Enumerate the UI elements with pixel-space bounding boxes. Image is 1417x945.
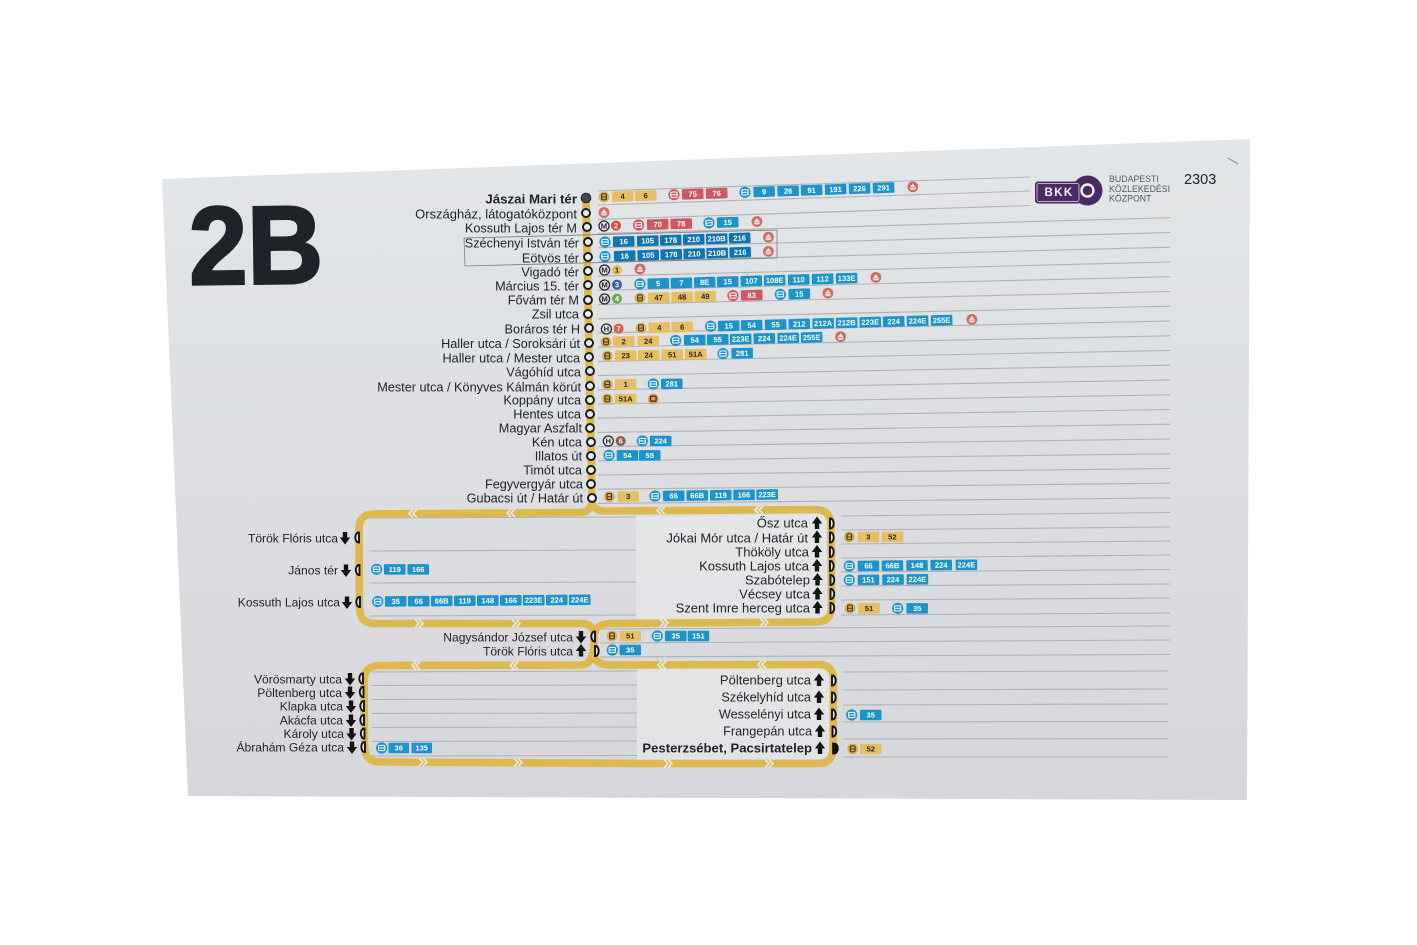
row: Klapka utca: Klapka utca — [280, 700, 343, 714]
row: Boráros tér H: 212 — [793, 319, 806, 329]
row: Wesselényi utca: Wesselényi utca — [719, 708, 812, 722]
row: Kossuth Lajos utca (left): Kossuth Lajos utca — [238, 596, 340, 610]
row: Boráros tér H: 224 — [887, 317, 901, 326]
row: Széchenyi István tér — [465, 231, 774, 250]
row: Kossuth Lajos utca (left): 66 — [414, 597, 423, 606]
row: Boráros tér H: 212A — [814, 319, 833, 328]
row: Nagysándor József utca: 35 — [671, 632, 681, 641]
row: Kossuth Lajos utca (left): 223E — [525, 596, 543, 605]
row: Kén utca: 6 — [619, 437, 623, 446]
row: Jókai Mór utca / Határ út: 3 — [866, 533, 871, 542]
row: Vigadó tér: M — [601, 266, 608, 275]
row: Haller utca / Soroksári út: 24 — [644, 337, 653, 346]
row: Szabótelep — [745, 572, 928, 588]
row: Március 15. tér: 133E — [838, 274, 856, 283]
route line — [359, 198, 834, 764]
row: Március 15. tér — [495, 272, 881, 294]
row: Március 15. tér: 7 — [679, 278, 684, 288]
row: Zsil utca: Zsil utca — [532, 308, 580, 322]
row: Ábrahám Géza utca: 135 — [415, 744, 429, 753]
row: Kossuth Lajos utca (left): 224 — [550, 596, 564, 605]
row: Fővám tér M: 15 — [795, 289, 804, 299]
row: Kén utca: 224 — [654, 437, 668, 446]
row: Haller utca / Mester utca: Haller utca / Mester utca — [442, 352, 581, 366]
row: Kossuth Lajos utca (left): 119 — [459, 596, 471, 605]
row: Ábrahám Géza utca — [236, 740, 432, 754]
row: Jászai Mari tér: 76 — [712, 189, 721, 198]
text: organisation name — [1109, 174, 1170, 204]
row: Országház: Országház, látogatóközpont — [415, 206, 577, 222]
row: Wesselényi utca — [719, 708, 882, 722]
row: Boráros tér H: 15 — [724, 321, 734, 331]
row: Fővám tér M: M — [601, 295, 608, 304]
row: Boráros tér H: H — [604, 325, 609, 334]
row: Jászai Mari tér: 75 — [688, 190, 698, 199]
row: Ábrahám Géza utca: 36 — [394, 744, 403, 753]
row: Jászai Mari tér: 26 — [784, 186, 792, 196]
row: Haller utca / Soroksári út: 54 — [690, 336, 700, 345]
row: Ábrahám Géza utca: Ábrahám Géza utca — [236, 740, 344, 754]
row: Március 15. tér: 107 — [745, 276, 758, 286]
row: Timót utca: Timót utca — [523, 464, 583, 478]
row: Szent Imre herceg utca — [676, 600, 928, 616]
row: Haller utca / Mester utca: 23 — [621, 351, 630, 360]
row: Kossuth Lajos utca (left) — [238, 594, 591, 610]
row: Kossuth Lajos utca (right): 148 — [911, 561, 923, 570]
row: Kossuth Lajos tér M: M — [601, 222, 607, 231]
row: Akácfa utca: Akácfa utca — [280, 714, 343, 728]
row: Ősz utca: Ősz utca — [757, 516, 809, 530]
row: Kossuth Lajos utca (right): 224 — [935, 561, 948, 570]
row: Kossuth Lajos tér M: 2 — [614, 221, 618, 230]
row: Gubacsi út / Határ út: 66 — [669, 491, 678, 501]
row: Kossuth Lajos tér M: 15 — [723, 218, 733, 227]
row: Jászai Mari tér: 191 — [829, 185, 843, 194]
row: Kossuth Lajos utca (left): 148 — [481, 596, 494, 605]
row: Vörösmarty utca: Vörösmarty utca — [254, 672, 342, 686]
row: Jászai Mari tér: 9 — [762, 187, 766, 196]
row: Szabótelep: Szabótelep — [745, 572, 810, 588]
row: Vigadó tér — [521, 264, 645, 280]
row: Vécsey utca: Vécsey utca — [739, 586, 811, 602]
row: Eötvös tér: 16 — [620, 251, 629, 261]
row: Fővám tér M: 4 — [615, 294, 620, 303]
row: Széchenyi István tér: 16 — [619, 237, 628, 246]
row: Illatos út: 55 — [645, 451, 655, 460]
text: organisation name: BUDAPESTI — [1109, 174, 1159, 184]
row: Eötvös tér: 178 — [665, 250, 678, 259]
row: Fővám tér M: 48 — [678, 293, 686, 302]
row: Mester utca / Könyves Kálmán körút — [377, 378, 683, 394]
row: Haller utca / Soroksári út: 2 — [621, 337, 626, 346]
row: Kossuth Lajos utca (right): 224E — [957, 560, 975, 570]
row: Széchenyi István tér: 210 — [687, 235, 700, 244]
row: Kossuth Lajos utca (left): 224E — [571, 595, 589, 605]
row: Gubacsi út / Határ út: 119 — [714, 491, 727, 500]
row: Kossuth Lajos tér M: 78 — [677, 219, 686, 229]
row: Magyar Aszfalt: Magyar Aszfalt — [499, 422, 582, 436]
row: János tér: 119 — [389, 565, 401, 574]
row: Kossuth Lajos utca (right) — [699, 558, 977, 574]
row: Wesselényi utca: 35 — [866, 711, 876, 720]
row: Haller utca / Mester utca: 51 — [668, 350, 677, 359]
row: Széchenyi István tér: 216 — [733, 234, 746, 243]
row: Szabótelep: 151 — [862, 575, 876, 585]
row: János tér: János tér — [288, 564, 338, 578]
row: Március 15. tér: 110 — [792, 275, 805, 284]
row: Eötvös tér — [522, 246, 774, 266]
row: Szent Imre herceg utca: 51 — [865, 604, 874, 613]
row: Haller utca / Mester utca: 281 — [736, 349, 749, 358]
row: Koppány utca: 51A — [619, 395, 633, 404]
row: Ősz utca — [757, 516, 834, 530]
row: Frangepán utca: Frangepán utca — [723, 724, 813, 738]
row: Jászai Mari tér: 4 — [620, 192, 626, 201]
row: Fővám tér M: 83 — [747, 291, 756, 300]
row: Török Flóris utca (right): 35 — [626, 646, 635, 655]
row: Március 15. tér: 112 — [816, 274, 829, 284]
row: Jászai Mari tér: 91 — [807, 186, 817, 195]
row: Koppány utca: Koppány utca — [503, 394, 582, 408]
row: Jászai Mari tér: 6 — [643, 191, 648, 200]
row: Széchenyi István tér: 210B — [707, 234, 726, 244]
row: Kossuth Lajos tér M: Kossuth Lajos tér M — [465, 222, 577, 236]
row: Török Flóris utca (left): Török Flóris utca — [248, 532, 338, 546]
row: Jászai Mari tér: Jászai Mari tér — [485, 192, 577, 206]
row: Pöltenberg utca (right): Pöltenberg utca — [720, 672, 812, 688]
row: Hentes utca: Hentes utca — [513, 408, 582, 422]
row: Pöltenberg utca (left): Pöltenberg utca — [257, 686, 342, 700]
row: Fővám tér M: 47 — [654, 293, 663, 302]
row: Károly utca: Károly utca — [284, 727, 344, 741]
row: Kossuth Lajos utca (left): 35 — [391, 597, 401, 606]
panel: lighter loop interior — [636, 514, 828, 620]
row: Kossuth Lajos utca (left): 66B — [435, 597, 449, 606]
callout: grouped stops box — [464, 230, 777, 266]
row: Nagysándor József utca: 151 — [692, 632, 706, 641]
panel: lighter lower loop interior — [637, 668, 830, 760]
row: Pesterzsébet, Pacsirtatelep: 52 — [866, 745, 875, 754]
row: Széchenyi István tér: Széchenyi István tér — [465, 236, 580, 250]
row: Eötvös tér: 105 — [642, 251, 655, 260]
row: Jászai Mari tér: 291 — [877, 183, 891, 193]
row: Boráros tér H: 4 — [657, 323, 662, 332]
row: Boráros tér H — [505, 314, 977, 336]
row: Jókai Mór utca / Határ út: 52 — [888, 533, 897, 542]
row: Koppány utca — [503, 394, 659, 408]
row: Pesterzsébet, Pacsirtatelep: Pesterzsébet, Pacsirtatelep — [642, 740, 812, 756]
row: Illatos út — [535, 450, 660, 464]
row: Eötvös tér: 210 — [688, 249, 701, 259]
row: Március 15. tér: Március 15. tér — [495, 280, 580, 294]
row: Haller utca / Soroksári út: 55 — [713, 335, 723, 344]
row: Kossuth Lajos utca (right): Kossuth Lajos utca — [699, 558, 810, 574]
row: Vigadó tér: 1 — [615, 266, 620, 275]
row: Jókai Mór utca / Határ út: Jókai Mór utca / Határ út — [666, 530, 808, 546]
row: Boráros tér H: 55 — [771, 320, 781, 329]
row: Március 15. tér: 8E — [700, 278, 709, 287]
row: Haller utca / Mester utca: 24 — [644, 351, 654, 360]
row: Nagysándor József utca: Nagysándor József utca — [443, 630, 573, 644]
icon: BKK logo: BKK — [1044, 187, 1074, 199]
panel: timetable board — [162, 139, 1250, 800]
row: Haller utca / Mester utca — [442, 347, 753, 366]
text: organisation name: KÖZPONT — [1109, 194, 1152, 204]
row: Boráros tér H: 7 — [616, 324, 621, 333]
row: Haller utca / Mester utca: 51A — [689, 350, 703, 359]
row: Thököly utca: Thököly utca — [735, 544, 810, 560]
row: Kossuth Lajos utca (right): 66 — [864, 561, 873, 571]
row: Jókai Mór utca / Határ út — [666, 530, 903, 546]
row: Gubacsi út / Határ út: 3 — [626, 492, 630, 501]
row: Jászai Mari tér: 226 — [853, 184, 866, 193]
row: Kén utca: Kén utca — [532, 436, 583, 450]
row: Gubacsi út / Határ út: 223E — [758, 490, 776, 499]
row: Március 15. tér: 5 — [656, 279, 661, 288]
row: Boráros tér H: 224E — [909, 316, 927, 326]
row: Szent Imre herceg utca: 35 — [913, 604, 922, 613]
row: Boráros tér H: 212B — [837, 318, 856, 328]
row: Török Flóris utca (right) — [483, 644, 641, 658]
row: Gubacsi út / Határ út: 166 — [738, 490, 750, 500]
row: Haller utca / Soroksári út: Haller utca / Soroksári út — [441, 337, 580, 351]
row: Szent Imre herceg utca: Szent Imre herceg utca — [676, 600, 811, 616]
row: János tér: 166 — [412, 565, 425, 574]
row: Kossuth Lajos tér M — [465, 216, 762, 236]
row: Illatos út: 54 — [623, 451, 632, 460]
row: Gubacsi út / Határ út — [467, 489, 778, 506]
row: Március 15. tér: 3 — [615, 280, 619, 289]
row: Március 15. tér: 108E — [766, 276, 784, 285]
row: Fegyvergyár utca: Fegyvergyár utca — [485, 478, 584, 492]
row: Március 15. tér: 15 — [723, 277, 733, 286]
row: Gubacsi út / Határ út: 66B — [690, 491, 705, 500]
row: Mester utca / Könyves Kálmán körút: 281 — [665, 379, 679, 389]
row: Eötvös tér: 210B — [708, 248, 727, 258]
route direction chevrons — [409, 506, 773, 768]
row: Szabótelep: 224 — [887, 575, 900, 584]
row: Eötvös tér: 216 — [734, 248, 747, 257]
row: Haller utca / Soroksári út: 224 — [758, 334, 771, 343]
row: Eötvös tér: Eötvös tér — [522, 252, 580, 266]
row: Mester utca / Könyves Kálmán körút: 1 — [624, 380, 629, 389]
row: Haller utca / Soroksári út: 223E — [732, 334, 750, 344]
row: Nagysándor József utca: 51 — [626, 632, 635, 641]
row: Kén utca: H — [606, 437, 611, 446]
row: Kossuth Lajos utca (left): 166 — [504, 596, 517, 605]
row: Boráros tér H: Boráros tér H — [505, 322, 580, 336]
row: Gubacsi út / Határ út: Gubacsi út / Határ út — [467, 492, 583, 506]
row: Kén utca — [532, 435, 672, 450]
title: 2B — [188, 183, 324, 309]
row: Török Flóris utca (right): Török Flóris utca — [483, 644, 573, 658]
row: Fővám tér M: Fővám tér M — [508, 294, 579, 308]
row: János tér — [288, 564, 429, 578]
row: Boráros tér H: 54 — [747, 321, 757, 330]
row: Március 15. tér: M — [601, 280, 608, 290]
row: Kossuth Lajos tér M: 70 — [653, 220, 662, 229]
row: Boráros tér H: 223E — [861, 318, 879, 327]
row: Haller utca / Soroksári út: 255E — [803, 333, 821, 342]
row: Fővám tér M: 49 — [701, 292, 710, 301]
row: Haller utca / Soroksári út: 224E — [779, 333, 797, 343]
row: Szabótelep: 224E — [908, 575, 926, 584]
row: Boráros tér H: 6 — [680, 323, 684, 332]
row: Illatos út: Illatos út — [535, 450, 582, 464]
row: Boráros tér H: 255E — [933, 316, 951, 325]
row: Székelyhíd utca: Székelyhíd utca — [721, 690, 812, 704]
row: Fővám tér M — [508, 287, 833, 308]
row: Mester utca / Könyves Kálmán körút: Mester utca / Könyves Kálmán körút — [377, 380, 581, 394]
icon: BKK logo — [1035, 176, 1102, 206]
row: Jászai Mari tér — [485, 181, 918, 206]
text: stop code: 2303 — [1184, 172, 1216, 188]
row: Vigadó tér: Vigadó tér — [521, 266, 580, 280]
row: Vágóhíd utca: Vágóhíd utca — [506, 366, 582, 380]
row: Nagysándor József utca — [443, 630, 709, 644]
row: Kossuth Lajos utca (right): 66B — [885, 561, 900, 570]
row: Széchenyi István tér: 105 — [641, 236, 655, 246]
row: Haller utca / Soroksári út — [441, 331, 846, 351]
row: Széchenyi István tér: 178 — [664, 236, 677, 245]
text: organisation name: KÖZLEKEDÉSI — [1109, 184, 1170, 194]
